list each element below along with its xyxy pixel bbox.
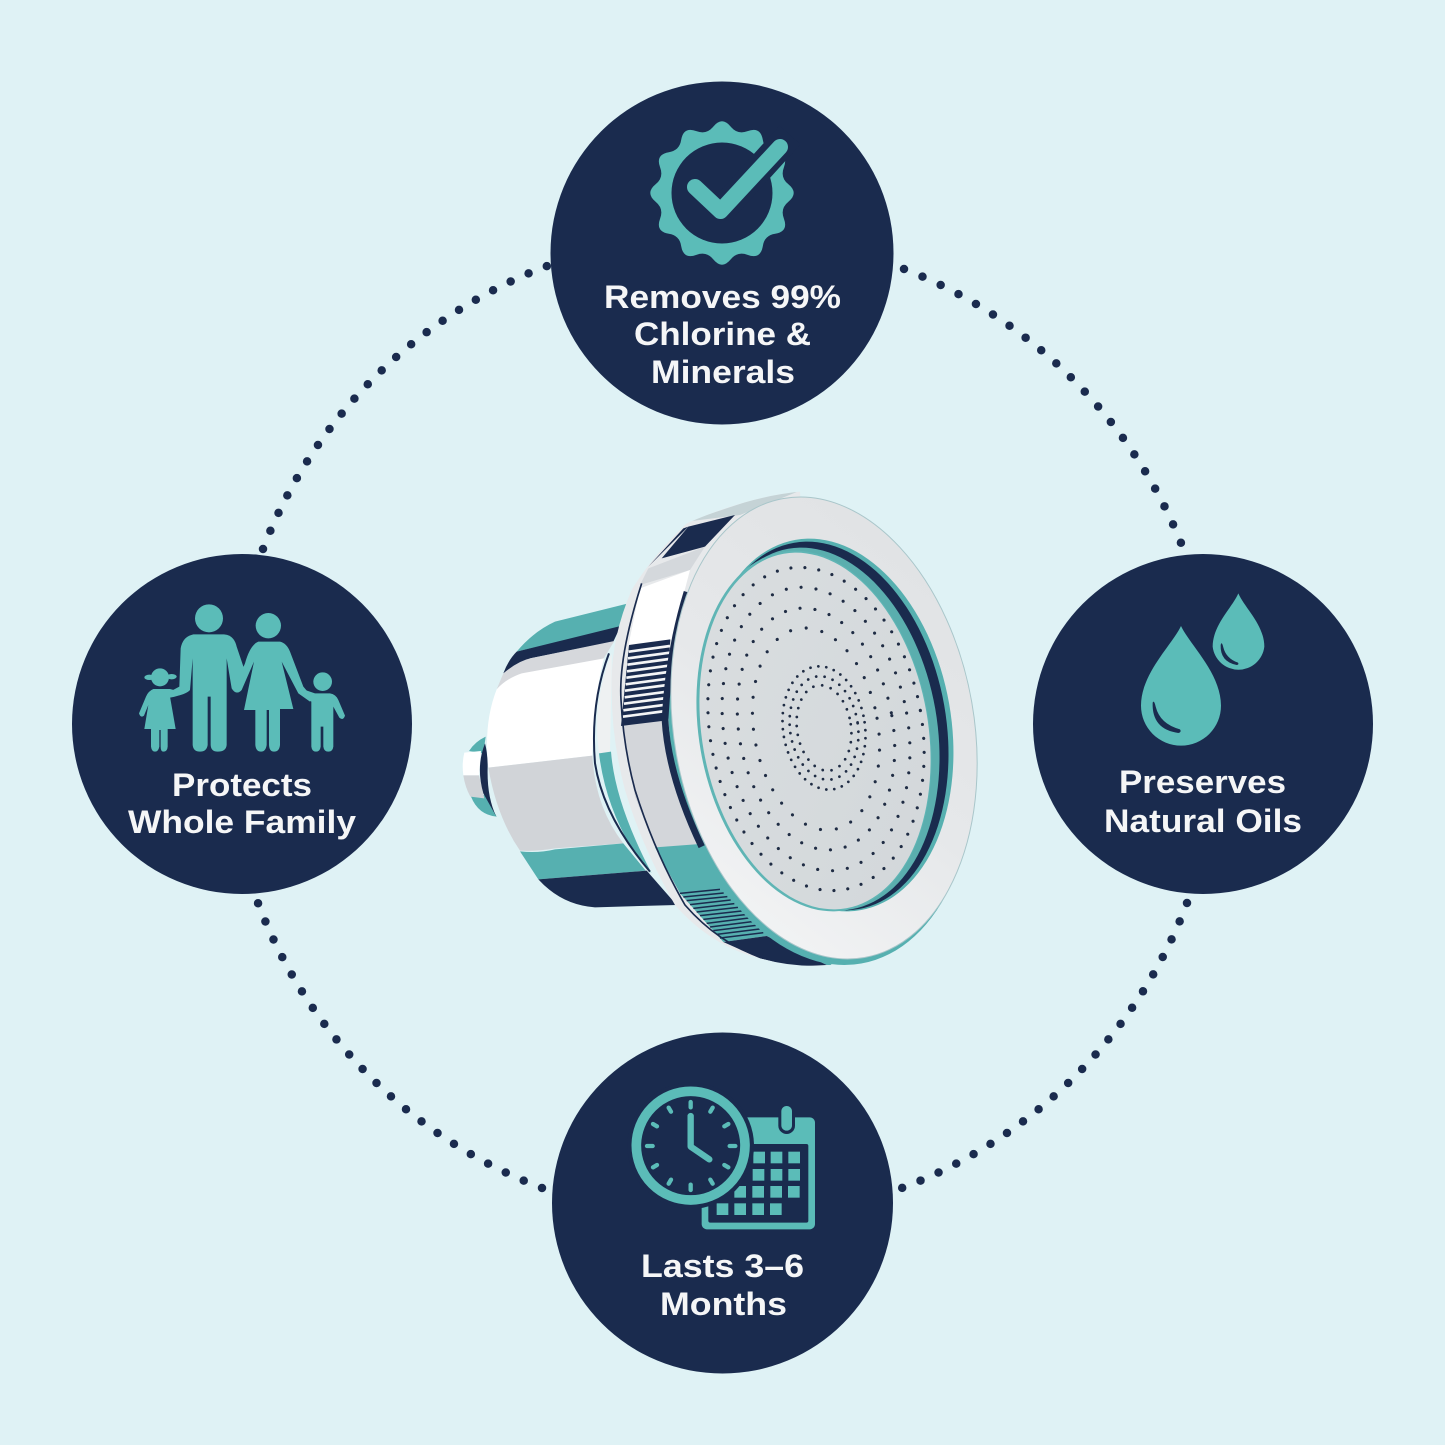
teal rim under front ring (633, 480, 1009, 990)
spray holes (683, 550, 949, 908)
label: Removes 99% (604, 279, 841, 315)
central shower head illustration (462, 492, 978, 966)
panel: preserves oils (1033, 554, 1373, 894)
badge circle (552, 1032, 893, 1374)
label: Chlorine & (634, 316, 811, 352)
icon: oil drops (1141, 593, 1264, 746)
recessed teal and navy lip (669, 518, 982, 932)
label: Months (660, 1286, 787, 1322)
navy shadow crescent (665, 592, 702, 847)
label (128, 767, 356, 840)
label: Protects (172, 767, 312, 803)
dotted connector ring (258, 266, 1187, 1188)
icon: seal check (650, 121, 794, 265)
label (1104, 764, 1302, 839)
label: Minerals (651, 354, 795, 390)
label: Natural Oils (1104, 803, 1302, 839)
badge circle (72, 554, 412, 894)
front chrome ring (636, 472, 1012, 984)
label: Preserves (1119, 764, 1286, 800)
spray plate (672, 534, 958, 928)
badge circle (1033, 554, 1373, 894)
badge circle (550, 82, 894, 424)
icon: clock and calendar (627, 1082, 815, 1229)
icon: family (139, 604, 345, 752)
label (604, 279, 841, 390)
flange with bands and grilles (612, 492, 832, 966)
panel: removes chlorine (550, 82, 894, 424)
label: Lasts 3–6 (641, 1248, 804, 1284)
panel: protects family (72, 554, 412, 894)
label: Whole Family (128, 804, 356, 840)
rear body and nozzle (463, 603, 677, 907)
panel: lasts months (552, 1032, 893, 1374)
label (641, 1248, 804, 1322)
